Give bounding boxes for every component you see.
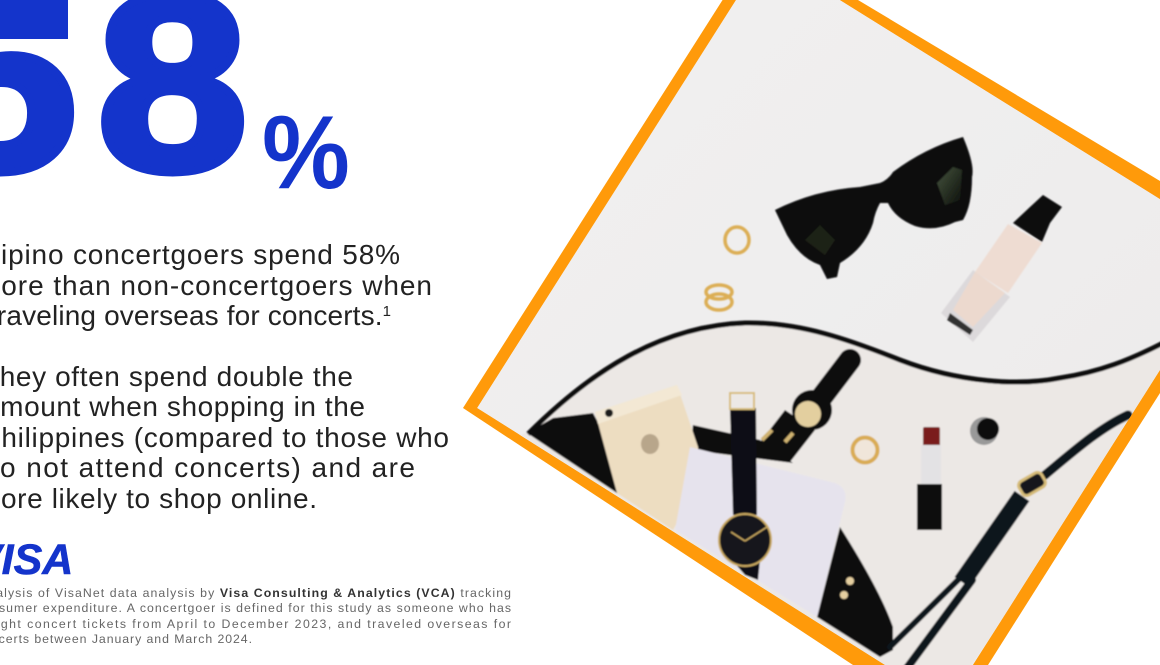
paragraph: overseas spending: traveling overseas for concerts. [0, 300, 383, 331]
paragraph: overseas spending: 1 [383, 303, 391, 320]
long strap with buckle [890, 415, 1128, 665]
foundation bottle [941, 195, 1062, 342]
photo: flat-lay of accessories [477, 0, 1160, 665]
bag flap interior [500, 323, 1160, 665]
orange photo frame [463, 0, 1160, 665]
paragraph: domestic shopping [0, 361, 449, 514]
bag body black [530, 412, 618, 494]
phone [595, 385, 700, 530]
lipstick [917, 427, 942, 530]
bag strap curve [528, 323, 1160, 434]
gold rings [706, 227, 749, 310]
paragraph: overseas spending [0, 239, 432, 331]
wristwatch [719, 393, 771, 580]
second watch on strap [758, 360, 850, 462]
footnote [0, 586, 511, 646]
bag studs [846, 577, 854, 585]
gold ring [852, 438, 878, 462]
white wallet [676, 446, 822, 616]
sunglasses [775, 137, 973, 279]
percent sign: % [262, 95, 350, 211]
black cosmetic jar [970, 417, 999, 445]
